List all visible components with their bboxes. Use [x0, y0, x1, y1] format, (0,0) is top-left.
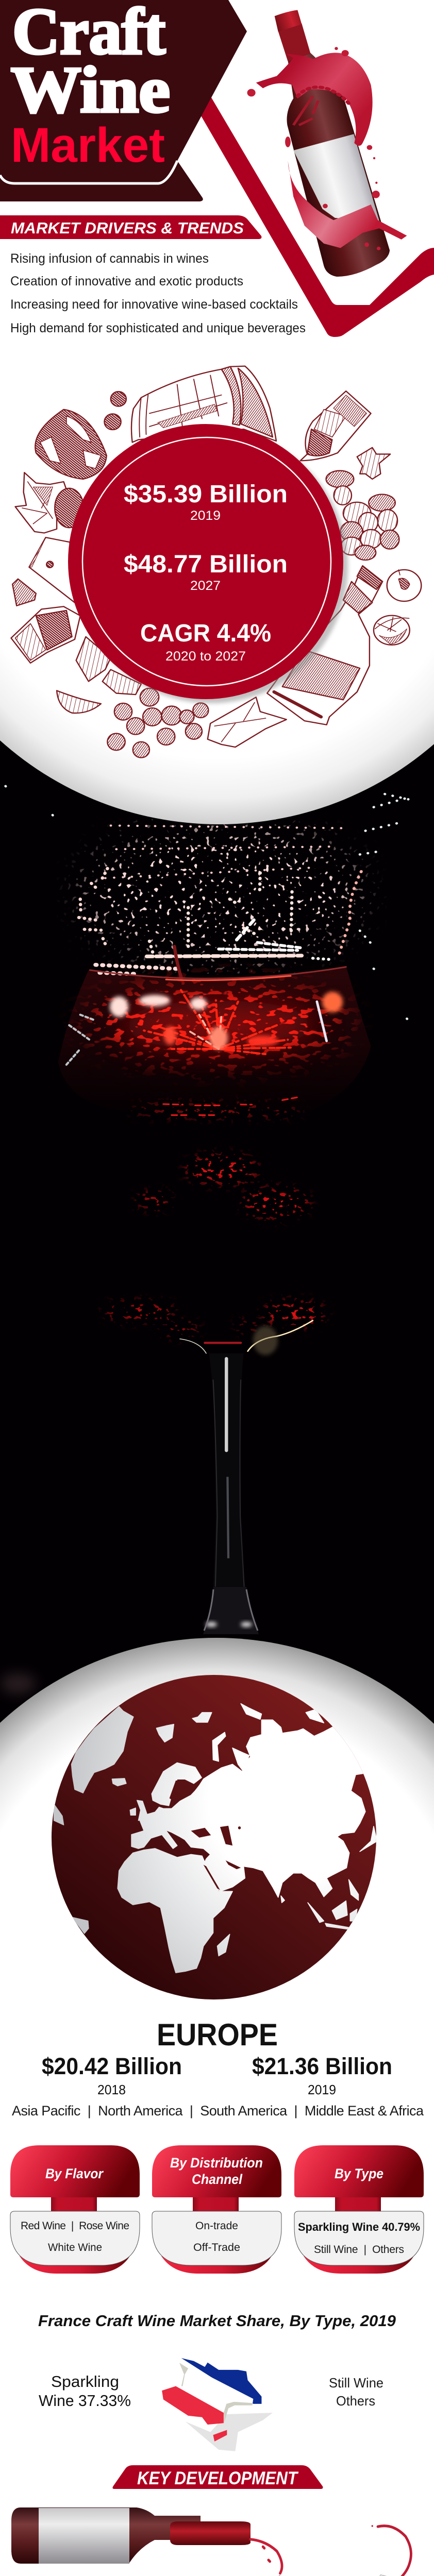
list: other regions: Asia Pacific | North America | South America | Middle East & Africa — [12, 2103, 424, 2119]
segment card: by distribution channel: Channel — [192, 2172, 242, 2187]
segment card: by type — [294, 2145, 424, 2274]
label: other types: Others — [336, 2393, 375, 2409]
stats circle — [68, 424, 348, 703]
world globe — [52, 1675, 377, 1999]
illustration: two wine glasses — [251, 2525, 416, 2576]
white disc: globe section background — [0, 1638, 434, 2576]
sketch: cheese — [29, 537, 75, 603]
stat: 2027 value: $48.77 Billion — [124, 551, 288, 578]
stat: CAGR: 2020 to 2027 — [165, 649, 246, 664]
glass bowl body — [58, 966, 371, 1109]
title: Market: Market — [11, 118, 165, 173]
white disc: top section background — [0, 0, 434, 824]
segment card: by flavor — [10, 2145, 140, 2274]
sketch: tilted wine glass — [35, 410, 107, 479]
sketch: flask bottle — [267, 566, 382, 725]
stat: 2019 value — [124, 481, 288, 523]
stat: 2019 value: 2019 — [190, 509, 221, 523]
segment card: by distribution channel: By Distribution — [170, 2155, 263, 2171]
stat: Europe 2019: $21.36 Billion — [252, 2053, 392, 2079]
sketch: bottom leaf — [208, 697, 287, 747]
sketch: lemon — [374, 616, 410, 645]
sketch: upright glass — [301, 391, 371, 461]
sketch: cheese cubes — [76, 637, 141, 694]
stat: Europe 2018 — [42, 2053, 182, 2097]
segment card: by flavor: White Wine — [48, 2242, 102, 2253]
segment card: by flavor: By Flavor — [45, 2166, 104, 2181]
banner: key development: KEY DEVELOPMENT — [137, 2468, 298, 2488]
sketch: left leaf and grape — [15, 472, 84, 533]
stat: CAGR — [140, 620, 271, 664]
list: market drivers — [10, 251, 306, 335]
stat: CAGR: CAGR 4.4% — [140, 620, 271, 647]
segment card: by distribution channel: Off-Trade — [193, 2242, 240, 2253]
stat: Europe 2019 — [252, 2053, 392, 2097]
red glow in the wine — [121, 1001, 316, 1050]
heading: Europe: EUROPE — [157, 2018, 278, 2052]
segment card: by type: By Type — [335, 2166, 383, 2181]
stat: 2027 value: 2027 — [190, 579, 221, 593]
label: sparkling wine share: Sparkling — [51, 2372, 119, 2391]
map: France in flag colours — [162, 2358, 273, 2451]
list: market drivers: Rising infusion of cannabis in wines — [10, 251, 209, 266]
sketch: small grapes — [104, 392, 126, 430]
sketch: right grape bunch — [326, 471, 399, 560]
wine stream — [251, 2539, 282, 2576]
illustration: wine bottle with splash — [247, 10, 407, 277]
red chevron ribbon — [201, 96, 434, 337]
illustration: hand-drawn wine and food sketch ring — [11, 366, 421, 757]
label: other types: Still Wine — [329, 2375, 383, 2391]
list: market drivers: Creation of innovative and exotic products — [10, 274, 243, 289]
stat: 2019 value: $35.39 Billion — [124, 481, 288, 508]
banner: market drivers and trends — [0, 215, 261, 239]
sketch: barrel — [131, 366, 276, 442]
stat: Europe 2018: $20.42 Billion — [42, 2053, 182, 2079]
sketch: fruit slice — [57, 690, 101, 713]
list: market drivers: Increasing need for innovative wine-based cocktails — [10, 297, 298, 312]
glass foot of bowl highlights — [180, 1320, 313, 1353]
sketch: apple — [387, 570, 421, 601]
glass rim and refraction rays — [66, 967, 346, 1115]
segment card: by distribution channel: On-trade — [195, 2220, 238, 2232]
segment card: by distribution channel — [152, 2145, 281, 2274]
sketch: bottom grape bunch — [107, 688, 208, 757]
stat: Europe 2019: 2019 — [308, 2082, 336, 2097]
photo: glass stem — [1, 1353, 259, 1694]
stat: 2027 value — [124, 551, 288, 593]
heading: France market share: France Craft Wine Market Share, By Type, 2019 — [38, 2312, 396, 2330]
right glass — [321, 2525, 416, 2576]
segment card: by flavor: Red Wine | Rose Wine — [21, 2220, 129, 2232]
title: Wine: Wine — [11, 53, 170, 126]
photo: wine splash in glass — [6, 786, 408, 1360]
page background: black photo band — [0, 721, 434, 1752]
lower red reflections noise — [97, 1096, 333, 1344]
list: market drivers: High demand for sophisticated and unique beverages — [10, 321, 306, 335]
light flecks above the glass — [57, 819, 387, 974]
segment card: by type: Still Wine | Others — [314, 2244, 404, 2256]
stat: Europe 2018: 2018 — [97, 2082, 126, 2097]
title panel — [0, 0, 247, 201]
illustration: pouring bottle — [11, 2507, 282, 2576]
segment card: by type: Sparkling Wine 40.79% — [298, 2221, 420, 2233]
bright highlights in the bowl — [110, 992, 343, 1049]
sketch: lower glass — [11, 606, 80, 663]
label: sparkling wine share — [39, 2372, 131, 2410]
banner: market drivers and trends: MARKET DRIVERS & TRENDS — [11, 219, 244, 237]
label: other types — [329, 2375, 383, 2409]
hand-placed splash droplets — [6, 786, 408, 1019]
label: sparkling wine share: Wine 37.33% — [39, 2392, 131, 2410]
red caustics noise — [67, 963, 366, 1084]
sketch: small leaf — [357, 448, 390, 479]
